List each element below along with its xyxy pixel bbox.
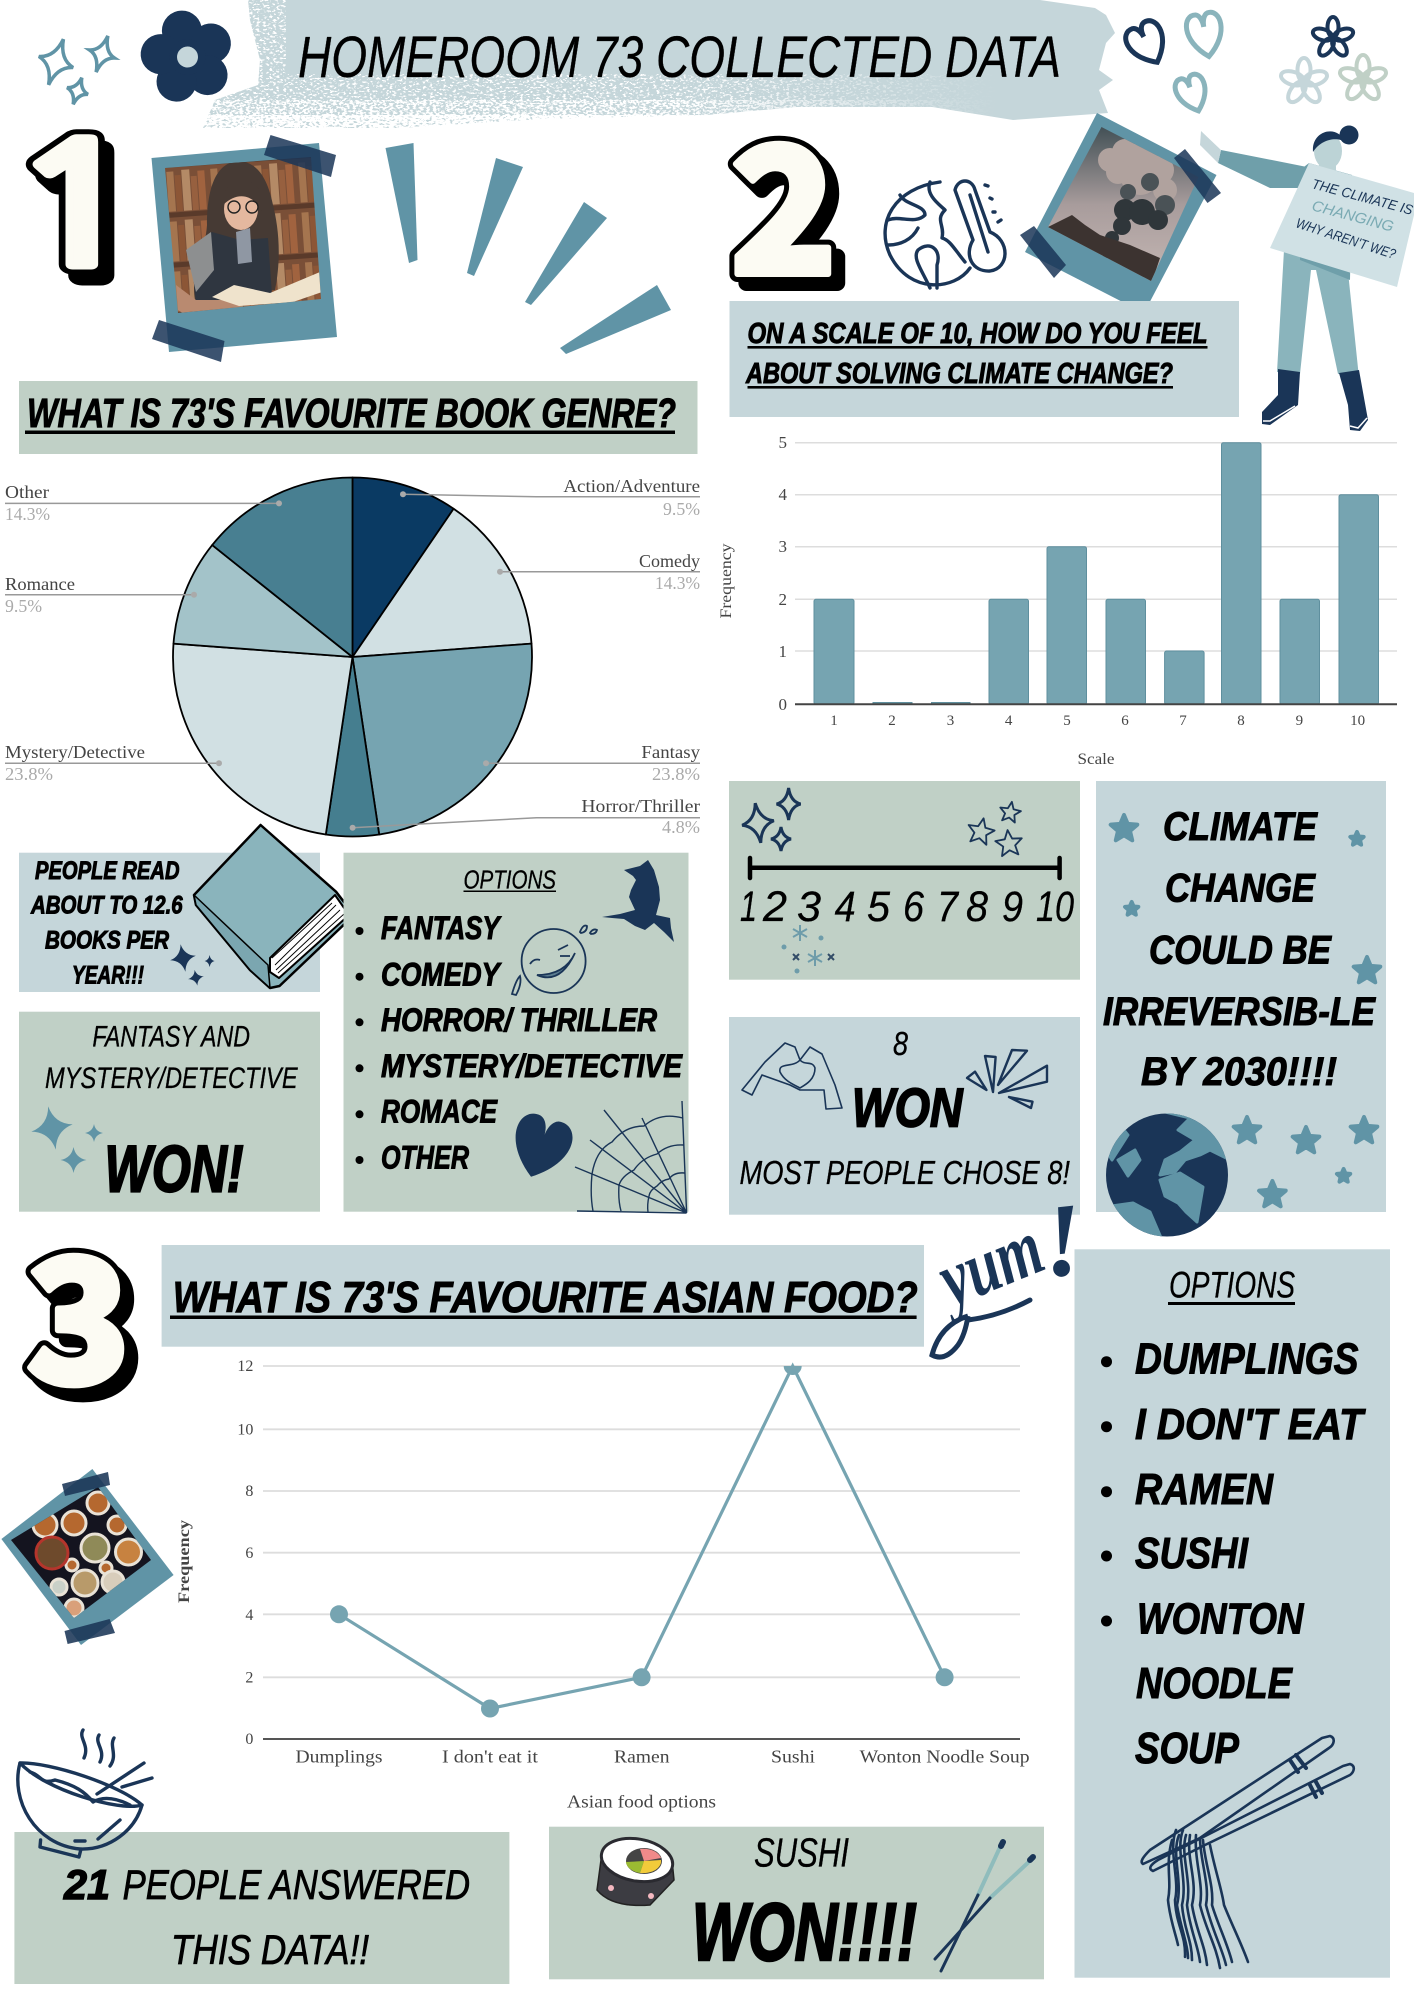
scale line [750, 858, 1060, 878]
panel: heading question 3 [162, 1245, 924, 1347]
icon: earth globe [1106, 1114, 1228, 1236]
pie chart: book genres: Comedy [639, 551, 700, 571]
panel: climate change irreversible [1096, 781, 1386, 1212]
panel: Asian food options [1074, 1249, 1390, 1978]
panel: fantasy and mystery won [19, 1012, 320, 1212]
options list: ROMACE [381, 1094, 498, 1130]
scale numbers: 10 [1036, 883, 1074, 931]
icon: stars [1111, 815, 1380, 1206]
bar chart: climate feeling scale: Scale [1078, 751, 1114, 768]
scale numbers: 2 [762, 883, 787, 931]
options list: COMEDY [381, 957, 502, 993]
pie chart: book genres: 4.8% [662, 817, 700, 837]
bar chart: climate feeling scale: 8 [1237, 713, 1245, 729]
icon: globe with thermometer [885, 181, 1005, 288]
line chart: Asian food: 2 [245, 1670, 253, 1686]
pie chart: book genres: 23.8% [652, 764, 700, 784]
bar chart: climate feeling scale: 5 [778, 433, 787, 452]
panel: 8 won [729, 1017, 1080, 1215]
icon: outline flowers [1279, 17, 1388, 105]
pie chart: book genres: Other [5, 482, 49, 502]
pie chart: book genres: 14.3% [5, 504, 50, 524]
pie chart: book genres: Action/Adventure [563, 476, 700, 496]
panel: people answered: THIS DATA!! [171, 1926, 369, 1973]
illustration: climate protester with sign: WHY AREN'T WE? [1294, 215, 1398, 262]
line chart: Asian food: Frequency [176, 1520, 193, 1603]
line chart: Asian food: I don't eat it [442, 1747, 538, 1767]
pie chart: book genres: Fantasy [641, 742, 700, 762]
bar chart: climate feeling scale: 10 [1350, 713, 1365, 729]
panel: sushi won [549, 1827, 1044, 1979]
polaroid photo: Asian dishes [0, 1469, 174, 1645]
panel: fantasy and mystery won: WON! [105, 1132, 244, 1206]
panel: heading question 1: WHAT IS 73'S FAVOURITE BOOK GENRE? [27, 390, 676, 436]
options list: SUSHI [1135, 1529, 1249, 1578]
icon: outline stars [965, 800, 1023, 857]
icon: navy heart [504, 1110, 577, 1186]
bar chart: climate feeling scale: 2 [888, 713, 896, 729]
bar chart: climate feeling scale: Frequency [718, 544, 735, 618]
panel: 8 won: MOST PEOPLE CHOSE 8! [740, 1154, 1070, 1191]
icon: laughing face [512, 926, 597, 995]
polaroid photo: girl reading [150, 143, 337, 352]
pie chart: book genres: 9.5% [663, 499, 700, 519]
panel: climate change irreversible: IRREVERSIB-LE [1103, 990, 1376, 1034]
section number 3: 3 [35, 1192, 140, 1442]
bar chart: climate feeling scale: 4 [778, 485, 788, 504]
scale numbers: 4 [835, 883, 856, 931]
panel: number scale [729, 781, 1080, 980]
bar chart: climate feeling scale: 2 [778, 590, 787, 609]
pie chart: book genres: Horror/Thriller [581, 796, 700, 816]
line chart: Asian food: 12 [237, 1358, 253, 1375]
panel: climate change irreversible: CLIMATE [1163, 805, 1318, 849]
panel: heading question 2: ABOUT SOLVING CLIMATE CHANGE? [745, 358, 1173, 390]
line chart: Asian food: 10 [237, 1422, 253, 1438]
options list: DUMPLINGS [1135, 1334, 1358, 1383]
line chart: Asian food: 4 [245, 1607, 253, 1624]
scale numbers: 8 [966, 883, 988, 931]
options list [1135, 1334, 1366, 1773]
list bullets [356, 927, 364, 1164]
icon: teal sparkles [27, 1103, 103, 1173]
panel: heading question 2 [730, 301, 1239, 417]
icon: spider web [575, 1101, 687, 1213]
list bullets [1101, 1356, 1112, 1626]
icon: sushi roll [597, 1833, 676, 1905]
section number 1: 1 [7, 124, 146, 292]
options list: SOUP [1135, 1724, 1240, 1773]
panel: heading question 2: ON A SCALE OF 10, HOW DO YOU FEEL [748, 318, 1208, 350]
panel: climate change irreversible: COULD BE [1149, 928, 1332, 972]
icon: closed book [194, 825, 354, 988]
tape: photo 1 [152, 135, 336, 362]
line chart: Asian food [176, 1358, 1030, 1812]
line chart: Asian food: Dumplings [296, 1747, 382, 1767]
icon: navy sparkles [168, 942, 215, 987]
bar chart: climate feeling scale: 9 [1296, 713, 1303, 729]
bar chart: climate feeling scale: 1 [778, 642, 787, 661]
icon: small sparkles [782, 925, 834, 974]
icon: outline sparkles [31, 32, 120, 108]
title: HOMEROOM 73 COLLECTED DATA [298, 25, 1061, 90]
bar chart: climate feeling scale: 4 [1005, 713, 1013, 729]
script callout: yum: yum [920, 1203, 1055, 1326]
tape: photo 3 [62, 1472, 115, 1644]
options list: MYSTERY/DETECTIVE [381, 1048, 683, 1084]
bar chart: climate feeling scale: 3 [778, 537, 787, 556]
scale numbers: 9 [1002, 883, 1023, 931]
panel: people answered: 21 [63, 1861, 110, 1908]
options list: HORROR/ THRILLER [381, 1002, 657, 1038]
options list: I DON'T EAT [1135, 1400, 1366, 1449]
options list: FANTASY [381, 910, 502, 946]
scale numbers: 6 [903, 883, 924, 931]
panel: books per year: ABOUT TO 12.6 [30, 891, 183, 919]
section number 2: 2 [739, 79, 846, 334]
panel: heading question 3: WHAT IS 73'S FAVOURITE ASIAN FOOD? [173, 1273, 918, 1322]
pie chart: book genres: 9.5% [5, 596, 42, 616]
panel: people answered [14, 1832, 509, 1984]
section number 1: 1 [17, 135, 156, 303]
options list: WONTON [1137, 1594, 1305, 1643]
panel: books per year: PEOPLE READ [35, 857, 180, 885]
bar chart: climate feeling scale [718, 433, 1397, 768]
bar chart: climate feeling scale: 3 [947, 713, 954, 729]
pie chart: book genres: 23.8% [5, 764, 53, 784]
icon: hearts [1122, 11, 1226, 116]
panel: 8 won: WON [852, 1077, 964, 1139]
icon: dragon [602, 860, 674, 942]
bar chart: climate feeling scale: 0 [778, 695, 787, 714]
panel: books per year: YEAR!!! [72, 961, 144, 989]
panel: people answered: PEOPLE ANSWERED [123, 1861, 470, 1908]
section number 3: 3 [26, 1183, 131, 1433]
pie chart: book genres: Romance [5, 574, 75, 594]
line chart: Asian food: 8 [245, 1483, 253, 1500]
panel: book genre options: OPTIONS [464, 864, 557, 894]
line chart: Asian food: 6 [245, 1545, 253, 1562]
panel: fantasy and mystery won: MYSTERY/DETECTIVE [45, 1062, 298, 1095]
panel: book genre options [344, 853, 688, 1213]
scale numbers: 1 [740, 883, 757, 931]
options list [381, 910, 683, 1175]
illustration: climate protester with sign [1200, 126, 1414, 431]
line chart: Asian food: 0 [245, 1731, 253, 1748]
scale numbers: 5 [867, 883, 891, 931]
line chart: Asian food: Ramen [614, 1747, 670, 1767]
bar chart: climate feeling scale: 6 [1121, 713, 1129, 729]
bar chart: climate feeling scale: 1 [830, 713, 838, 729]
bar chart: climate feeling scale: 5 [1063, 713, 1071, 729]
line chart: Asian food: Wonton Noodle Soup [860, 1747, 1030, 1767]
section number 1: 1 [7, 124, 146, 292]
title banner: brush stroke [200, 0, 1115, 130]
icon: chopsticks [935, 1842, 1033, 1971]
panel: books per year [19, 853, 320, 992]
scale numbers: 3 [797, 883, 821, 931]
script callout: yum: ! [1036, 1181, 1089, 1300]
burst rays [386, 143, 671, 354]
panel: 8 won: 8 [893, 1025, 909, 1062]
pie chart: book genres: Mystery/Detective [5, 742, 145, 762]
panel: climate change irreversible: BY 2030!!!! [1141, 1050, 1337, 1094]
line chart: Asian food: Sushi [771, 1747, 815, 1767]
tape: photo 2 [1020, 149, 1221, 278]
panel: fantasy and mystery won: FANTASY AND [92, 1021, 250, 1054]
icon: outline sparkles [739, 788, 801, 851]
icon: burst outline [967, 1050, 1047, 1108]
panel: sushi won: SUSHI [754, 1830, 849, 1876]
illustration: climate protester with sign: CHANGING [1310, 197, 1396, 236]
section number 2: 2 [730, 70, 837, 325]
icon: navy flower [128, 0, 248, 116]
panel: climate change irreversible: CHANGE [1165, 867, 1316, 911]
bar chart: climate feeling scale: 7 [1179, 713, 1187, 729]
options list: OTHER [381, 1139, 469, 1175]
pie chart: book genres [5, 476, 700, 837]
icon: chopsticks with noodles [1142, 1736, 1354, 1968]
panel: books per year: BOOKS PER [45, 926, 169, 954]
section number 2: 2 [730, 70, 837, 325]
icon: noodle bowl [18, 1730, 152, 1857]
icon: heart hands [742, 1043, 842, 1109]
options list: RAMEN [1135, 1465, 1274, 1514]
scale numbers: 7 [937, 883, 960, 931]
polaroid photo: smoke over city [1025, 113, 1216, 313]
panel: heading question 1 [19, 381, 698, 454]
options list: NOODLE [1136, 1659, 1293, 1708]
section number 3: 3 [26, 1183, 131, 1433]
line chart: Asian food: Asian food options [567, 1792, 716, 1812]
pie chart: book genres: 14.3% [655, 573, 700, 593]
panel: Asian food options: OPTIONS [1169, 1264, 1295, 1305]
panel: sushi won: WON!!!! [692, 1887, 917, 1978]
scale numbers [740, 883, 1074, 931]
